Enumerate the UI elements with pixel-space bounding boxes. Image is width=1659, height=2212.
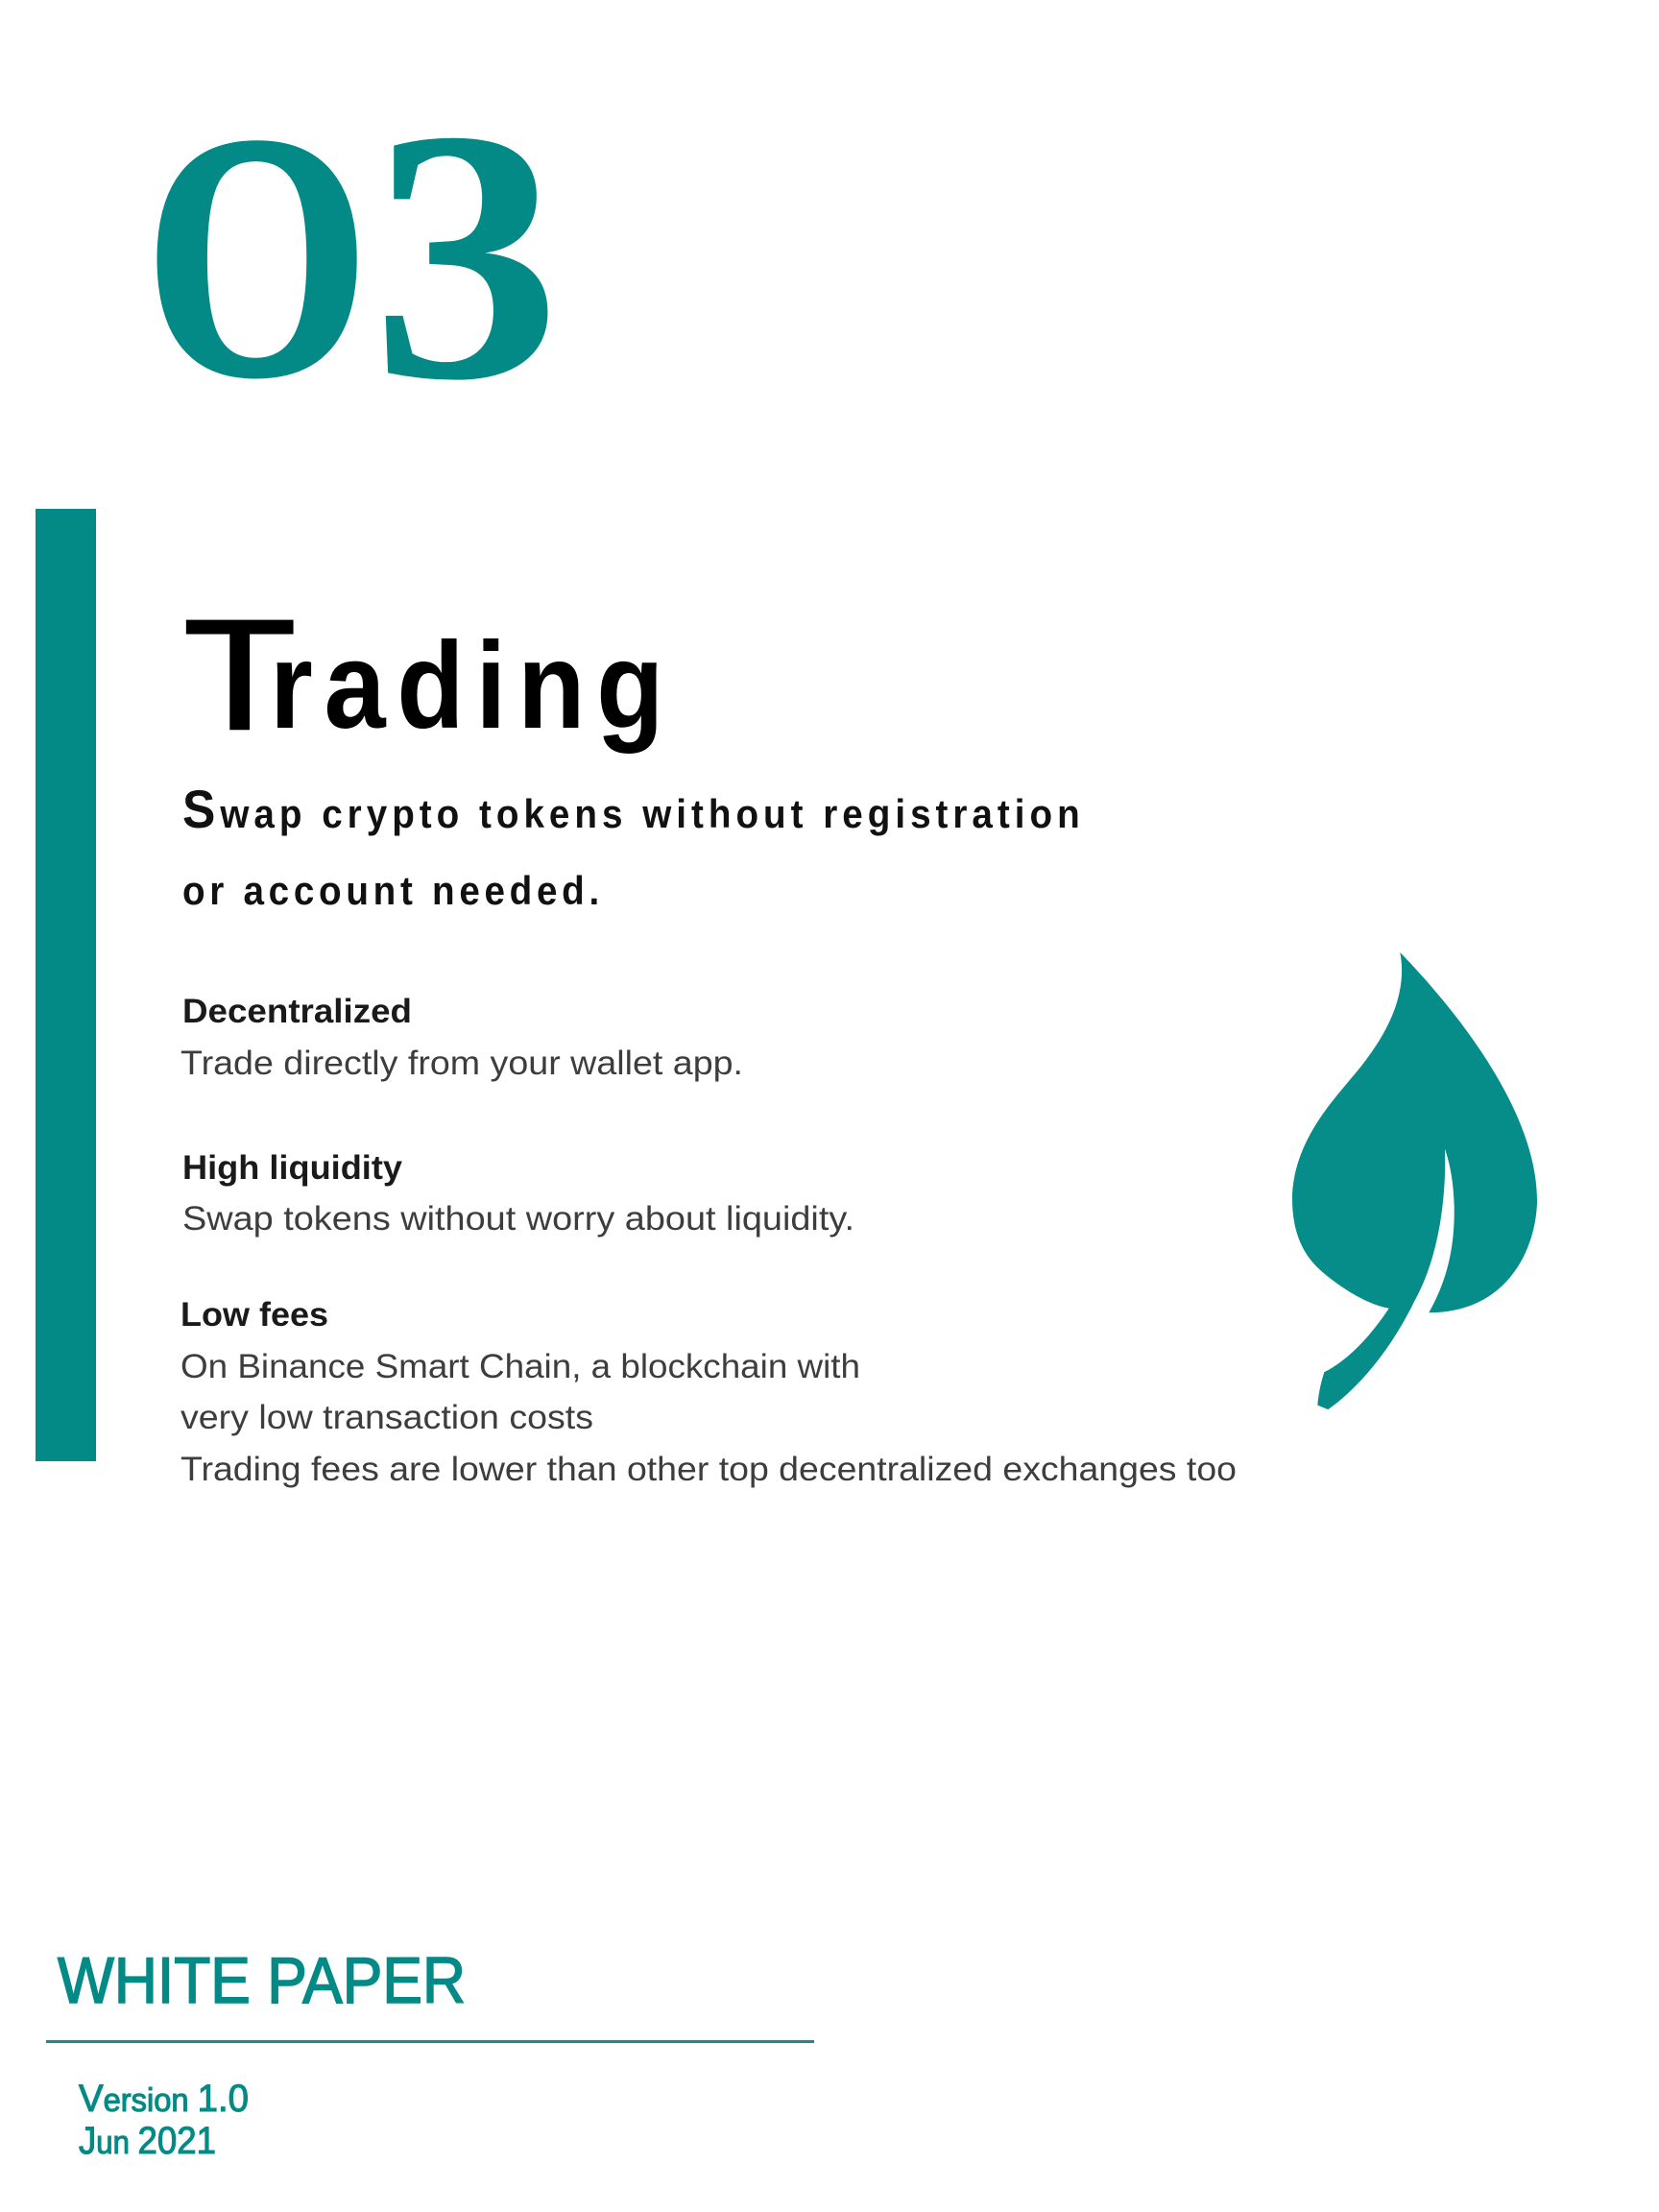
- feature: high liquidity: High liquidity: [182, 1149, 403, 1187]
- icon: leaf: [1292, 952, 1537, 1409]
- subheading: or account needed.: [182, 867, 599, 913]
- date: Jun 2021: [79, 2120, 216, 2162]
- feature: low fees: very low transaction costs: [180, 1399, 593, 1436]
- feature: low fees: On Binance Smart Chain, a blockchain with: [180, 1348, 860, 1385]
- heading: [183, 587, 675, 762]
- footer: [46, 1944, 814, 2162]
- feature: low fees: Trading fees are lower than other top decentralized exchanges too: [180, 1451, 1237, 1488]
- feature: decentralized: Trade directly from your wallet app.: [180, 1045, 743, 1082]
- section number: [145, 57, 561, 455]
- feature: decentralized: Decentralized: [182, 993, 412, 1030]
- feature: low fees: [180, 1296, 1237, 1488]
- subheading: [182, 780, 1080, 913]
- feature: low fees: Low fees: [180, 1296, 328, 1334]
- footer title: WHITE PAPER: [58, 1944, 466, 2017]
- accent bar: [36, 509, 96, 1461]
- subheading: Swap crypto tokens without registration: [182, 780, 1080, 839]
- heading: T: [183, 587, 297, 762]
- heading: rading: [270, 617, 675, 755]
- feature: high liquidity: [182, 1149, 854, 1238]
- feature: high liquidity: Swap tokens without worry about liquidity.: [182, 1200, 854, 1238]
- version: Version 1.0: [79, 2078, 249, 2120]
- section number: 0: [145, 68, 369, 446]
- section number: 3: [372, 57, 561, 455]
- footer rule: [46, 2040, 814, 2043]
- feature: decentralized: [180, 993, 743, 1082]
- panel: features: [180, 993, 1237, 1488]
